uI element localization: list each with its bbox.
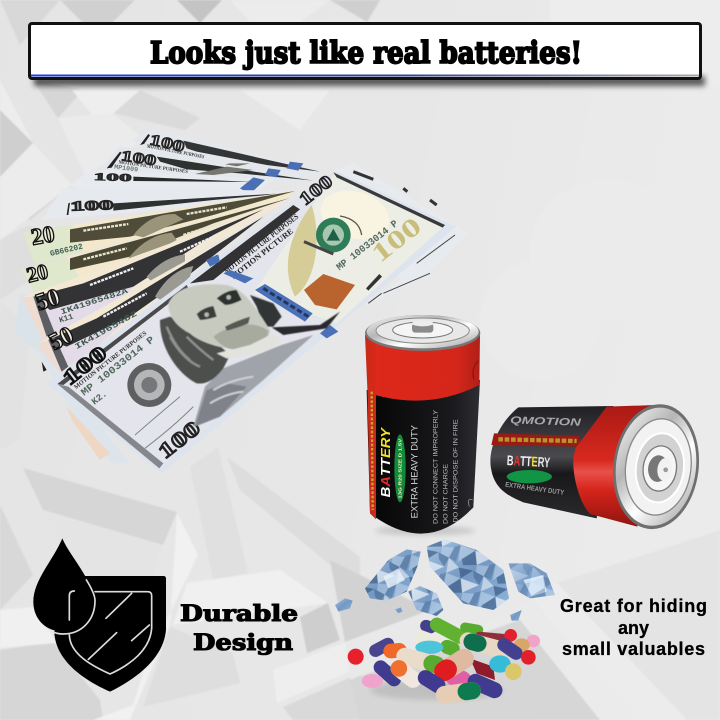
main 100 dollar bill: MP 10033014 P — [79, 334, 157, 398]
banner box — [30, 24, 700, 78]
small diamond — [408, 586, 443, 616]
tiny diamonds — [335, 598, 522, 621]
bank text: MOTION PICTURE PURPOSES — [73, 330, 149, 391]
side strip — [367, 388, 376, 519]
upright D-cell battery — [365, 315, 480, 535]
green seal — [304, 216, 362, 254]
back 100 bill A — [132, 128, 322, 179]
eyes — [197, 306, 217, 320]
battery cap — [365, 315, 480, 351]
right diamond — [508, 563, 555, 598]
orange patch — [304, 274, 355, 309]
battery body black — [367, 380, 480, 534]
battery cap — [606, 399, 706, 534]
50 dollar bill B: IK41965482 — [74, 309, 139, 352]
back 100 bill D: 100 — [70, 197, 114, 214]
banner shadow — [34, 76, 705, 86]
hair left — [160, 317, 230, 384]
bill paper — [47, 171, 456, 473]
main 100 dollar bill: MOTION PICTURE PURPOSES — [222, 212, 300, 276]
battery text: DO NOT CHARGE — [442, 463, 449, 524]
fan of banknotes — [15, 128, 468, 473]
water drop — [33, 538, 93, 632]
left diamond — [365, 549, 421, 601]
battery text: QMOTION — [510, 415, 582, 429]
gold 100: 100 — [366, 211, 427, 268]
50 dollar bill B — [37, 217, 265, 377]
banner blue underline — [31, 74, 699, 76]
battery text: EXTRA HEAVY DUTY — [505, 482, 565, 497]
main 100 dollar bill: 100 — [155, 417, 205, 463]
title text: Looks just like real batteries! — [150, 36, 582, 71]
valuables caption: any — [618, 618, 649, 638]
large diamond — [427, 539, 509, 610]
dark seal — [127, 363, 171, 407]
pill shadow — [370, 680, 503, 700]
water drop outline — [53, 579, 95, 634]
back 100 bill A: 100 — [148, 131, 187, 156]
50 dollar bill B: 50 — [45, 322, 78, 356]
serial numbers: MP 10033014 P — [334, 218, 400, 273]
printed stripe — [491, 433, 580, 447]
50 dollar bill A: K11 — [58, 312, 75, 326]
50 dollar bill A — [22, 202, 285, 342]
Franklin portrait — [160, 284, 340, 427]
shield hatch lines — [88, 593, 149, 659]
battery red band — [573, 405, 655, 527]
back 100 bill B: 100 — [120, 148, 157, 169]
back 100 bill B: MP1009 — [114, 163, 139, 174]
battery text: DO NOT DISPOSE OF IN FIRE — [452, 419, 459, 523]
main 100 dollar bill: 100 — [295, 171, 336, 209]
battery text: BATTERY — [378, 427, 393, 497]
water drop highlight — [69, 591, 74, 620]
battery text: 13G R20 SIZE D 1.5V — [398, 438, 403, 499]
battery body black — [490, 406, 613, 518]
title banner — [30, 24, 705, 86]
battery text: BATTERY — [507, 452, 551, 470]
durable design shield and water drop icon — [33, 538, 166, 692]
printed borders — [57, 285, 188, 385]
battery red band — [365, 333, 480, 401]
back 100 bill A: MOTION PICTURE PURPOSES — [146, 144, 205, 160]
durable design label: Durable — [180, 601, 298, 627]
back 100 bill D — [42, 188, 295, 220]
20 dollar bill A: GB66202 — [49, 243, 84, 259]
50 dollar bill A: 50 — [32, 284, 63, 316]
battery shadow — [375, 526, 475, 535]
valuables caption — [560, 596, 707, 659]
20 dollar bill B: 20 — [24, 259, 51, 288]
diamonds — [335, 539, 555, 621]
gold quill — [288, 205, 317, 297]
20 dollar bill A: 20 — [29, 221, 57, 251]
main 100 dollar bill: K2. — [89, 388, 109, 407]
back 100 bill B: MOTION PICTURE PURPOSES — [118, 160, 188, 175]
lying D-cell battery — [490, 399, 706, 534]
battery text: DO NOT CONNECT IMPROPERLY — [432, 409, 439, 524]
back 100 bill B — [100, 146, 315, 183]
pile of pills — [348, 615, 540, 704]
mouth — [225, 317, 250, 331]
20 dollar bill A — [23, 191, 295, 265]
battery text — [505, 415, 582, 497]
main 100 dollar bill — [47, 171, 456, 473]
watermark portrait — [315, 183, 395, 247]
signatures — [135, 397, 193, 448]
durable design label — [180, 601, 298, 656]
valuables caption: Great for hiding — [560, 596, 707, 616]
dark wedge — [272, 312, 340, 335]
coat — [193, 335, 313, 427]
20 dollar bill B — [22, 197, 292, 293]
face — [168, 284, 270, 349]
corner 100s: 100 — [59, 342, 111, 390]
shield inner outline — [69, 592, 152, 674]
valuables caption: small valuables — [562, 639, 705, 659]
battery text: EXTRA HEAVY DUTY — [410, 425, 420, 518]
50 dollar bill A: IK41965482A — [60, 287, 129, 317]
back 100 bill C — [70, 169, 273, 198]
shield — [54, 576, 166, 692]
back 100 bill C: 100 — [93, 172, 132, 184]
under-layer paper stacks — [15, 163, 468, 463]
collar — [217, 333, 282, 358]
main 100 dollar bill: MOTION PICTURE — [229, 227, 295, 281]
hair right — [250, 295, 282, 327]
blue security ribbon — [207, 255, 338, 338]
battery text — [378, 361, 478, 524]
durable design label: Design — [193, 630, 293, 656]
